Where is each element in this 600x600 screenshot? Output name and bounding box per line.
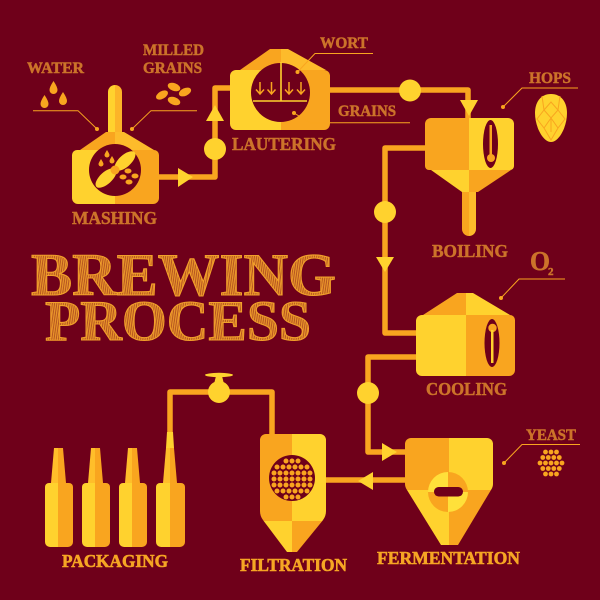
milled grains callout: GRAINS: [143, 60, 202, 77]
cooling tank: [416, 293, 515, 376]
wort callout: WORT: [320, 35, 368, 52]
label: mashing: MASHING: [72, 208, 157, 228]
fermentation tank: [405, 438, 493, 545]
title: [31, 242, 336, 353]
oxygen callout: O: [530, 246, 550, 276]
bottle 4: [156, 432, 185, 547]
bottles: [45, 432, 185, 547]
oxygen callout: [499, 246, 565, 300]
label: boiling: BOILING: [432, 241, 508, 261]
mashing tun: [72, 85, 159, 204]
title: PROCESS: [45, 290, 311, 353]
grains callout: [292, 103, 410, 123]
grains callout: GRAINS: [338, 103, 396, 120]
yeast callout: [502, 427, 580, 476]
bottle 3: [119, 448, 147, 547]
milled grains callout: MILLED: [143, 42, 204, 59]
filtration tank: [260, 434, 326, 552]
boiling kettle: [425, 118, 514, 236]
lautering tun: [230, 49, 330, 130]
hops callout: [501, 70, 578, 142]
milled grains callout: [130, 42, 204, 131]
yeast callout: YEAST: [526, 427, 576, 444]
label: cooling: COOLING: [426, 379, 507, 399]
water callout: WATER: [27, 60, 84, 77]
label: packaging: PACKAGING: [62, 551, 168, 571]
pipes: [158, 88, 468, 480]
label: lautering: LAUTERING: [232, 134, 336, 154]
water callout: [27, 60, 99, 131]
label: filtration: FILTRATION: [240, 555, 347, 575]
valve: [205, 373, 233, 403]
title: BREWING: [31, 242, 336, 308]
oxygen callout: 2: [548, 266, 554, 278]
arrows and junction nodes: [178, 80, 478, 490]
bottle 1: [45, 448, 73, 547]
bottle 2: [82, 448, 110, 547]
hops callout: HOPS: [529, 70, 571, 87]
label: fermentation: FERMENTATION: [377, 548, 520, 568]
wort callout: [296, 35, 373, 74]
